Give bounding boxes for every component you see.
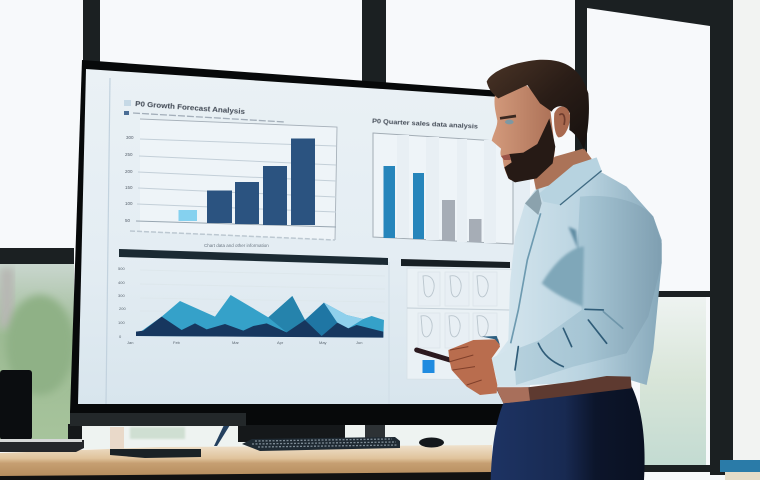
hair	[487, 60, 589, 150]
belt	[496, 376, 632, 403]
torso	[493, 170, 662, 387]
area chart	[136, 295, 384, 338]
panel header bar	[119, 249, 388, 265]
monitor bezel	[70, 60, 530, 425]
blue square	[422, 360, 434, 373]
axis labels: 50	[125, 218, 131, 223]
collar	[525, 157, 602, 215]
axis labels	[125, 135, 134, 223]
chart frame	[373, 133, 513, 244]
axis labels: 300	[118, 293, 125, 298]
phone	[417, 350, 450, 360]
cuff	[492, 345, 518, 385]
axis labels: May	[319, 340, 327, 345]
monitor	[68, 60, 530, 442]
ear	[554, 107, 570, 137]
axis labels: 250	[125, 152, 133, 157]
panel header bar	[401, 259, 510, 268]
placket	[511, 213, 541, 343]
desk	[0, 445, 492, 480]
mouse	[419, 438, 444, 448]
axis labels	[118, 266, 362, 345]
axis labels: Jan	[127, 340, 133, 345]
axis labels: Apr	[277, 340, 284, 345]
eye	[500, 116, 516, 118]
bars	[384, 166, 395, 238]
thumbnail panel	[401, 259, 530, 380]
axis labels: Mar	[232, 340, 240, 345]
axis labels: 150	[125, 185, 133, 190]
thumbnails	[418, 272, 497, 348]
axis labels: 100	[118, 320, 125, 325]
axis labels: 0	[119, 334, 122, 339]
beard	[504, 118, 555, 182]
sleeve creases	[515, 309, 623, 370]
caption: Chart data and other information	[204, 243, 269, 248]
monitor screen	[78, 69, 530, 404]
blue object at right edge	[720, 460, 760, 472]
monitor stand	[68, 420, 385, 442]
axis labels: 500	[118, 266, 125, 271]
neck	[533, 148, 595, 200]
chart title: P0 Quarter sales data analysis	[372, 118, 479, 131]
bars	[178, 138, 315, 225]
axis labels: 400	[118, 280, 125, 285]
axis labels: 100	[125, 201, 133, 206]
axis labels: 300	[126, 135, 134, 140]
face	[492, 85, 555, 180]
bar chart panel: right	[372, 118, 513, 244]
keyboard	[242, 437, 400, 451]
axis labels: 200	[119, 306, 126, 311]
laptop	[0, 370, 84, 452]
shirt shadow	[542, 247, 584, 307]
bar chart panel: left	[124, 100, 337, 248]
person	[417, 60, 662, 480]
chart frame	[140, 119, 337, 240]
chart title: P0 Growth Forecast Analysis	[135, 101, 245, 116]
axis labels: 200	[125, 169, 133, 174]
hands	[448, 336, 500, 395]
tablet on desk	[110, 449, 201, 458]
sleeve	[492, 196, 662, 385]
area chart panel	[118, 249, 388, 345]
trousers	[491, 387, 645, 480]
axis labels: Feb	[173, 340, 181, 345]
axis labels: Jun	[356, 340, 362, 345]
